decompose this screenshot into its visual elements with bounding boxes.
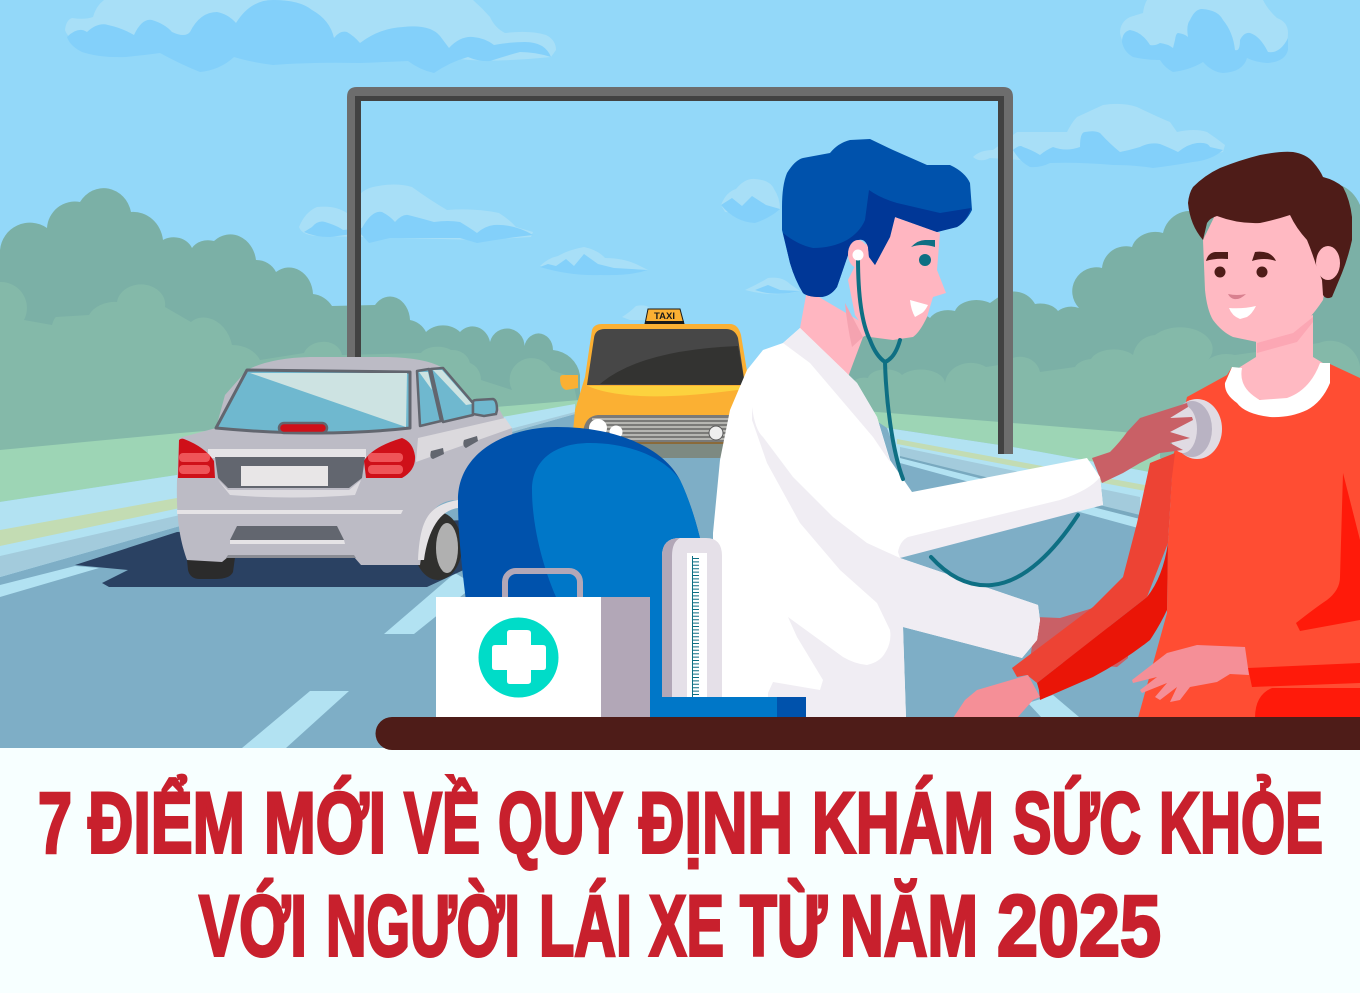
kit side <box>601 597 650 718</box>
rear right tyre <box>414 512 462 580</box>
plate recess <box>215 457 365 488</box>
road <box>0 412 1360 750</box>
doctor <box>713 139 1193 718</box>
back tree line, left <box>0 188 580 460</box>
doctor hand <box>1092 403 1193 483</box>
rear window <box>216 370 410 433</box>
coat collar <box>783 328 890 462</box>
patient neck <box>1228 315 1335 420</box>
patient smile <box>1229 306 1256 319</box>
taxi roof sign: TAXI <box>654 311 675 322</box>
first aid kit <box>436 571 650 718</box>
title line 2 <box>199 878 1161 974</box>
title line 2: NGƯỜI <box>326 878 520 974</box>
title line 1: ĐIỂM <box>88 776 245 872</box>
side windows <box>417 369 441 426</box>
patient hair <box>1188 152 1352 298</box>
taxi windshield <box>587 329 745 385</box>
doctor eye <box>919 254 931 266</box>
title <box>38 776 1323 974</box>
clouds <box>65 0 1288 320</box>
title line 1: MỚI <box>264 776 386 872</box>
right tail light <box>364 438 415 478</box>
grass and road edge, left <box>0 400 580 597</box>
patient waist band <box>1248 663 1360 687</box>
kit front <box>436 597 601 718</box>
patient collar <box>1225 363 1330 417</box>
patient shirt shading <box>1296 473 1360 631</box>
title line 2: 2025 <box>997 878 1161 974</box>
title line 2: TỪ <box>740 878 827 974</box>
door handles <box>430 448 444 459</box>
grass and road edge, right <box>860 410 1160 534</box>
title line 2: VỚI <box>199 878 307 974</box>
kit handle <box>505 571 580 611</box>
patient arm shadow <box>1037 543 1168 700</box>
doctor neck shadow <box>845 303 863 347</box>
doctor neck <box>800 290 875 377</box>
boot trim <box>208 449 366 458</box>
doctor eyebrow <box>911 240 935 247</box>
doctor lower hand <box>1030 608 1128 667</box>
taxi body <box>573 324 752 432</box>
coat body shading <box>752 407 1040 718</box>
wheel arch <box>418 500 458 560</box>
blue chair <box>458 427 720 718</box>
brake light <box>279 423 327 433</box>
taxi <box>560 309 757 458</box>
taxi bonnet highlight <box>588 386 745 396</box>
stethoscope chest piece <box>1169 399 1222 459</box>
title line 1: VỀ <box>404 776 480 872</box>
title line 2: LÁI <box>539 878 632 974</box>
doctor hair <box>782 139 972 297</box>
left tail light <box>178 439 215 478</box>
doctor hair shadow <box>783 190 971 297</box>
patient lap shading <box>1255 688 1360 718</box>
medical cross badge <box>478 618 558 698</box>
silver car <box>177 357 514 580</box>
taxi wing mirror <box>560 375 578 390</box>
wheel hub <box>436 523 458 573</box>
patient neck shadow <box>1257 317 1313 353</box>
title line 1: SỨC <box>1013 776 1141 872</box>
rear left tyre <box>186 550 236 579</box>
bumper line <box>177 510 403 514</box>
patient right hand <box>1132 645 1249 702</box>
title line 1: QUY <box>498 776 623 872</box>
title line 2: XE <box>649 878 724 974</box>
taxi grille <box>583 415 755 444</box>
title line 2: NĂM <box>840 878 978 974</box>
number plate <box>241 466 328 486</box>
doctor coat <box>713 328 1103 718</box>
patient left hand <box>953 675 1040 718</box>
title line 1: KHÁM <box>812 776 994 872</box>
title line 1 <box>38 776 1323 872</box>
front tree line, left <box>0 282 577 460</box>
road lane dashes <box>242 573 1079 748</box>
sky background <box>0 0 1360 750</box>
patient <box>953 152 1360 718</box>
patient ear <box>1316 246 1340 280</box>
patient eyes <box>1214 266 1268 278</box>
blood pressure monitor <box>650 538 806 718</box>
car body <box>177 357 514 565</box>
coat sleeve shading <box>898 477 1103 558</box>
patient torso <box>1138 364 1360 718</box>
taxi roof sign <box>645 309 684 324</box>
patient nose <box>1228 294 1246 299</box>
stethoscope earpiece <box>852 250 864 260</box>
doctor smile <box>910 300 928 317</box>
lower grille <box>230 526 344 540</box>
front tree line, right <box>845 327 1360 470</box>
patient eyebrows <box>1206 252 1276 261</box>
stethoscope tubing <box>858 258 1078 585</box>
wing mirror <box>473 399 497 416</box>
doctor head <box>848 217 946 340</box>
doctor ear <box>848 240 868 268</box>
billboard frame <box>347 87 1013 454</box>
patient head <box>1203 200 1330 342</box>
monitor base <box>650 697 777 718</box>
title line 1: ĐỊNH <box>639 776 793 872</box>
desk <box>376 717 1360 750</box>
car shadow <box>75 520 470 587</box>
patient arm <box>1012 453 1175 683</box>
back tree line, right <box>845 185 1360 470</box>
taxi bumper <box>582 444 757 458</box>
white title band <box>0 748 1360 993</box>
title line 1: 7 <box>38 776 72 872</box>
